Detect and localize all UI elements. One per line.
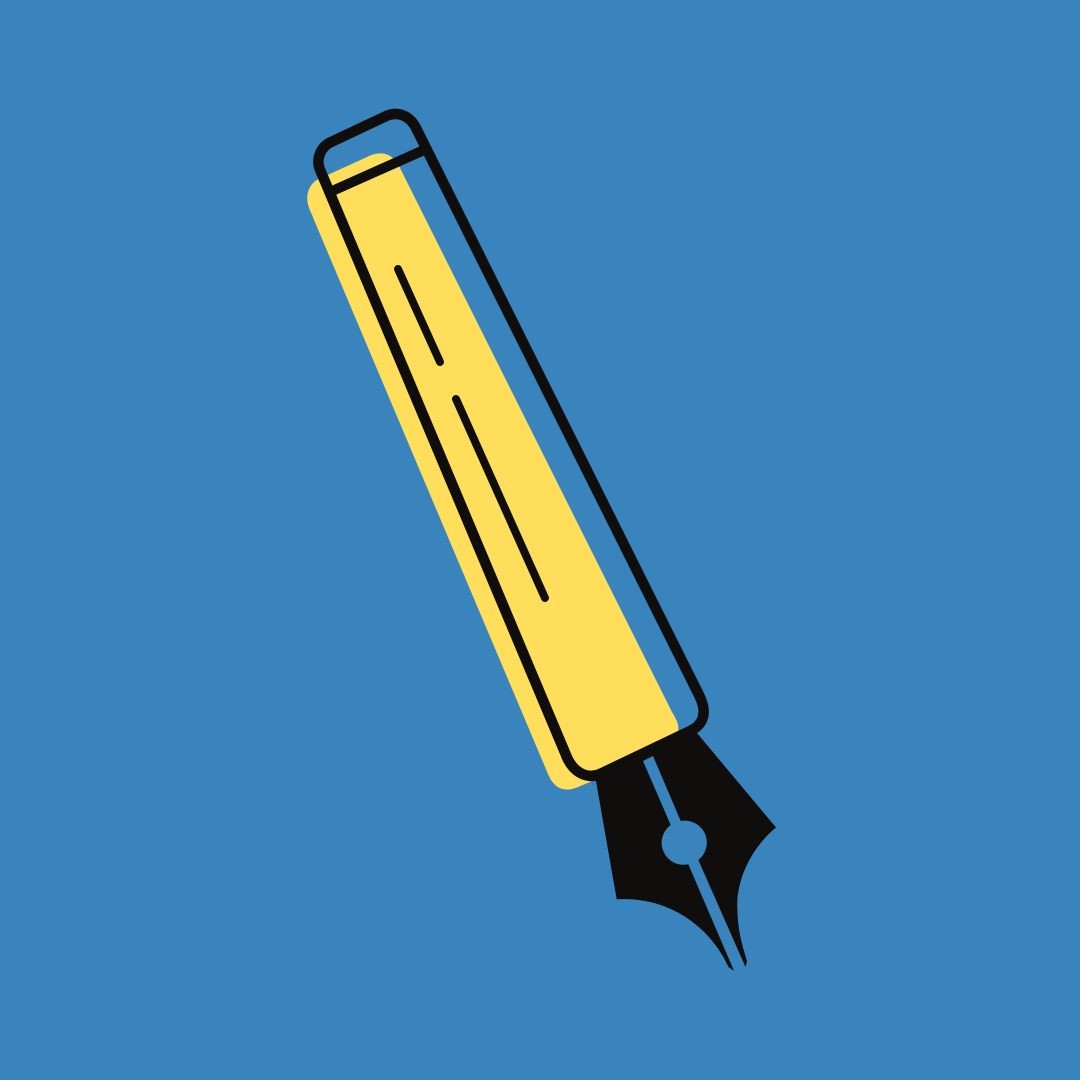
pen nib <box>596 731 776 971</box>
pen outline <box>318 114 704 776</box>
pen barrel yellow fill <box>307 153 678 790</box>
highlight line short <box>398 269 440 362</box>
highlight line long <box>456 399 545 598</box>
cap band <box>331 150 424 192</box>
